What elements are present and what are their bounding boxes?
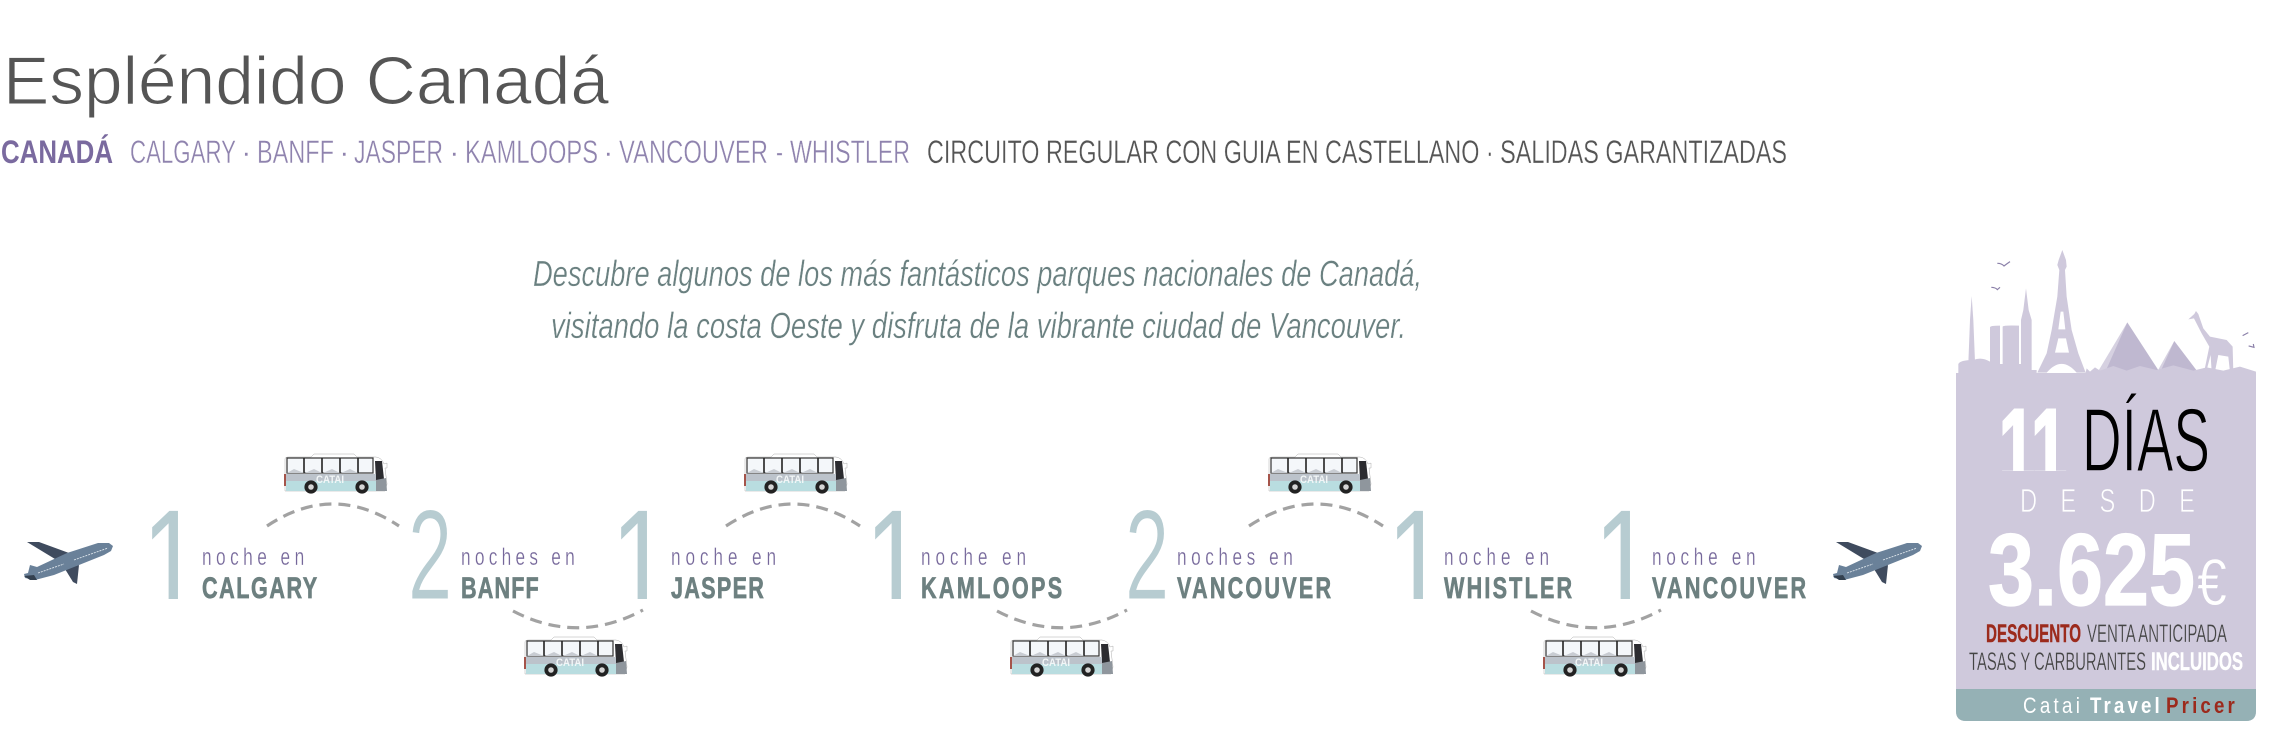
price panel: [1956, 250, 2256, 721]
stop: Banff: noches en: [461, 544, 575, 571]
subtitle line: VANCOUVER: [619, 134, 768, 170]
price: €: [2197, 545, 2227, 619]
brand: Pricer: [2166, 695, 2235, 718]
duration: 11: [1999, 388, 2067, 506]
stop: Vancouver final: noche en: [1652, 544, 1756, 571]
stop: Whistler: 1: [1387, 480, 1446, 644]
footer strip: [1956, 689, 2256, 721]
icon: return plane: [1833, 542, 1922, 584]
stop: Jasper: 1: [611, 480, 670, 644]
stop: Vancouver final: 1: [1594, 480, 1653, 644]
subtitle line: ·: [339, 134, 350, 170]
subtitle line: [1, 134, 1787, 170]
arc and bus: Vancouver to Whistler: [1249, 454, 1383, 526]
stop: Calgary: noche en: [202, 544, 304, 571]
brand: [2023, 695, 2235, 718]
stop: Vancouver: noches en: [1177, 544, 1293, 571]
stop: Vancouver: 2: [1125, 484, 1169, 627]
desde label: DESDE: [2020, 483, 2195, 520]
stop: Jasper: JASPER: [671, 570, 764, 605]
subtitle line: ·: [603, 134, 614, 170]
price: 3.625: [1988, 513, 2195, 627]
subtitle line: WHISTLER: [790, 134, 910, 170]
stop: Kamloops: [875, 510, 1062, 599]
subtitle line: -: [776, 134, 783, 170]
stop: Jasper: noche en: [671, 544, 776, 571]
arc and bus: Kamloops to Vancouver: [997, 610, 1127, 677]
icon: departure plane: [24, 542, 113, 584]
stop: Vancouver final: VANCOUVER: [1652, 570, 1806, 605]
title: Espléndido Canadá: [3, 43, 609, 119]
stop: Vancouver final: [1604, 510, 1806, 599]
stop: Kamloops: 1: [865, 480, 924, 644]
stop: Calgary: [152, 510, 318, 599]
stop: Vancouver: [1125, 484, 1331, 627]
intro text: Descubre algunos de los más fantásticos parques nacionales de Canadá,: [533, 253, 1422, 294]
brand: Travel: [2090, 695, 2160, 718]
discount note: TASAS Y CARBURANTES: [1969, 648, 2146, 676]
skyline silhouette: [1958, 250, 2256, 377]
subtitle line: CIRCUITO REGULAR CON GUIA EN CASTELLANO · SALIDAS GARANTIZADAS: [927, 134, 1787, 170]
stop: Whistler: WHISTLER: [1444, 570, 1572, 605]
stop: Banff: BANFF: [461, 570, 539, 605]
stop: Jasper: [621, 510, 775, 599]
subtitle line: ·: [241, 134, 252, 170]
stop: Whistler: noche en: [1444, 544, 1549, 571]
subtitle line: KAMLOOPS: [465, 134, 598, 170]
intro text: visitando la costa Oeste y disfruta de la vibrante ciudad de Vancouver.: [551, 305, 1406, 346]
stop: Kamloops: noche en: [921, 544, 1026, 571]
stop: Banff: 2: [408, 484, 452, 627]
arc and bus: Jasper to Kamloops: [726, 454, 860, 526]
stop: Banff: [408, 484, 575, 627]
stop: Kamloops: KAMLOOPS: [921, 570, 1062, 605]
birds: [1991, 262, 2254, 347]
subtitle line: JASPER: [354, 134, 443, 170]
subtitle line: CANADÁ: [1, 134, 113, 170]
brand: Catai: [2023, 695, 2080, 718]
subtitle line: CALGARY: [130, 134, 236, 170]
duration: [2002, 394, 2207, 472]
discount note: [1969, 620, 2243, 676]
arc and bus: Calgary to Banff: [267, 454, 399, 526]
panel background: [1956, 373, 2256, 721]
discount note: DESCUENTO: [1986, 620, 2081, 648]
arc and bus: Banff to Jasper: [513, 610, 643, 677]
stop: Calgary: 1: [142, 480, 201, 644]
stop: Calgary: CALGARY: [202, 570, 317, 605]
arc and bus: Whistler to Vancouver: [1531, 610, 1661, 677]
stop: Vancouver: VANCOUVER: [1177, 570, 1331, 605]
stop: Whistler: [1397, 510, 1572, 599]
subtitle line: ·: [449, 134, 460, 170]
intro text: [533, 253, 1422, 346]
subtitle line: BANFF: [257, 134, 334, 170]
